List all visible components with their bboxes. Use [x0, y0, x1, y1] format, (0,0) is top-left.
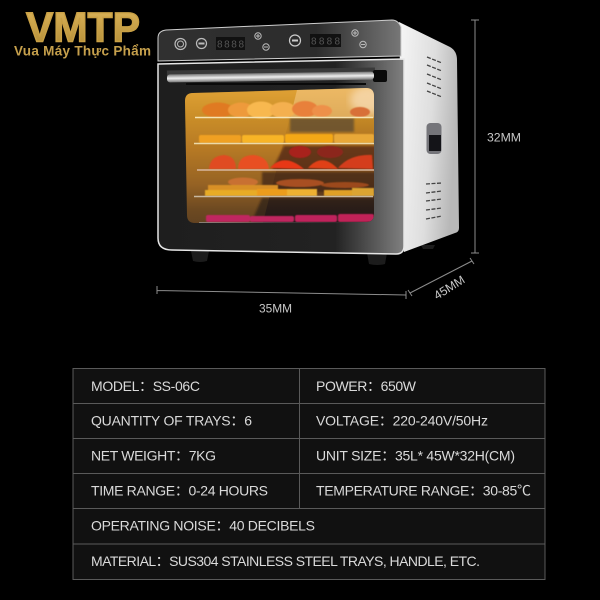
oven window	[185, 88, 374, 223]
power button	[175, 38, 186, 50]
logo	[14, 4, 151, 58]
spec: model: MODEL：SS-06C	[91, 378, 200, 394]
tray 3 strawberries	[209, 146, 373, 169]
dimension: depth	[408, 258, 474, 303]
logo tagline: Vua Máy Thực Phẩm	[14, 44, 151, 58]
logo wordmark: VMTP	[26, 4, 140, 50]
spec: noise: OPERATING NOISE：40 DECIBELS	[91, 518, 315, 534]
tray 5 food	[206, 214, 374, 222]
spec: voltage: VOLTAGE：220-240V/50Hz	[316, 412, 488, 428]
side vents lower	[426, 183, 442, 219]
tray shelves	[194, 118, 374, 223]
spec: trays: QUANTITY OF TRAYS：6	[91, 412, 252, 428]
table grid	[73, 368, 545, 580]
dimension: width: 35MM	[259, 302, 292, 316]
oven	[158, 20, 459, 265]
time button	[196, 38, 206, 48]
spec table	[73, 368, 545, 580]
side handle	[426, 123, 442, 154]
control panel	[158, 20, 401, 61]
spec: material: MATERIAL：SUS304 STAINLESS STEEL TRAYS, HANDLE, ETC.	[91, 553, 480, 569]
window reflection left	[185, 86, 298, 226]
left plus minus	[255, 33, 269, 50]
right plus minus	[352, 30, 366, 48]
spec: power: POWER：650W	[316, 378, 417, 394]
spec: time range: TIME RANGE：0-24 HOURS	[91, 482, 268, 498]
dimension: width	[157, 286, 406, 316]
left display: 8888	[217, 40, 244, 50]
spec: unit size: UNIT SIZE：35L* 45W*32H(CM)	[316, 448, 515, 464]
temp button	[290, 35, 300, 46]
door handle	[167, 68, 387, 85]
window glow right	[290, 86, 376, 118]
spec: temperature range: TEMPERATURE RANGE：30-85℃	[316, 482, 531, 498]
dimension: height	[471, 20, 521, 253]
oven feet	[191, 245, 435, 265]
dimension: height: 32MM	[487, 130, 521, 144]
tray 4 food	[205, 178, 374, 196]
tray 1 food	[202, 101, 370, 118]
oven side panel	[399, 22, 459, 252]
oven door	[158, 59, 404, 254]
spec: weight: NET WEIGHT：7KG	[91, 448, 216, 464]
right display: 8888	[311, 36, 340, 48]
side vents upper	[427, 57, 442, 97]
dark interior accents	[290, 118, 354, 132]
dimension: depth: 45MM	[431, 273, 467, 303]
tray 2 food	[199, 134, 374, 143]
